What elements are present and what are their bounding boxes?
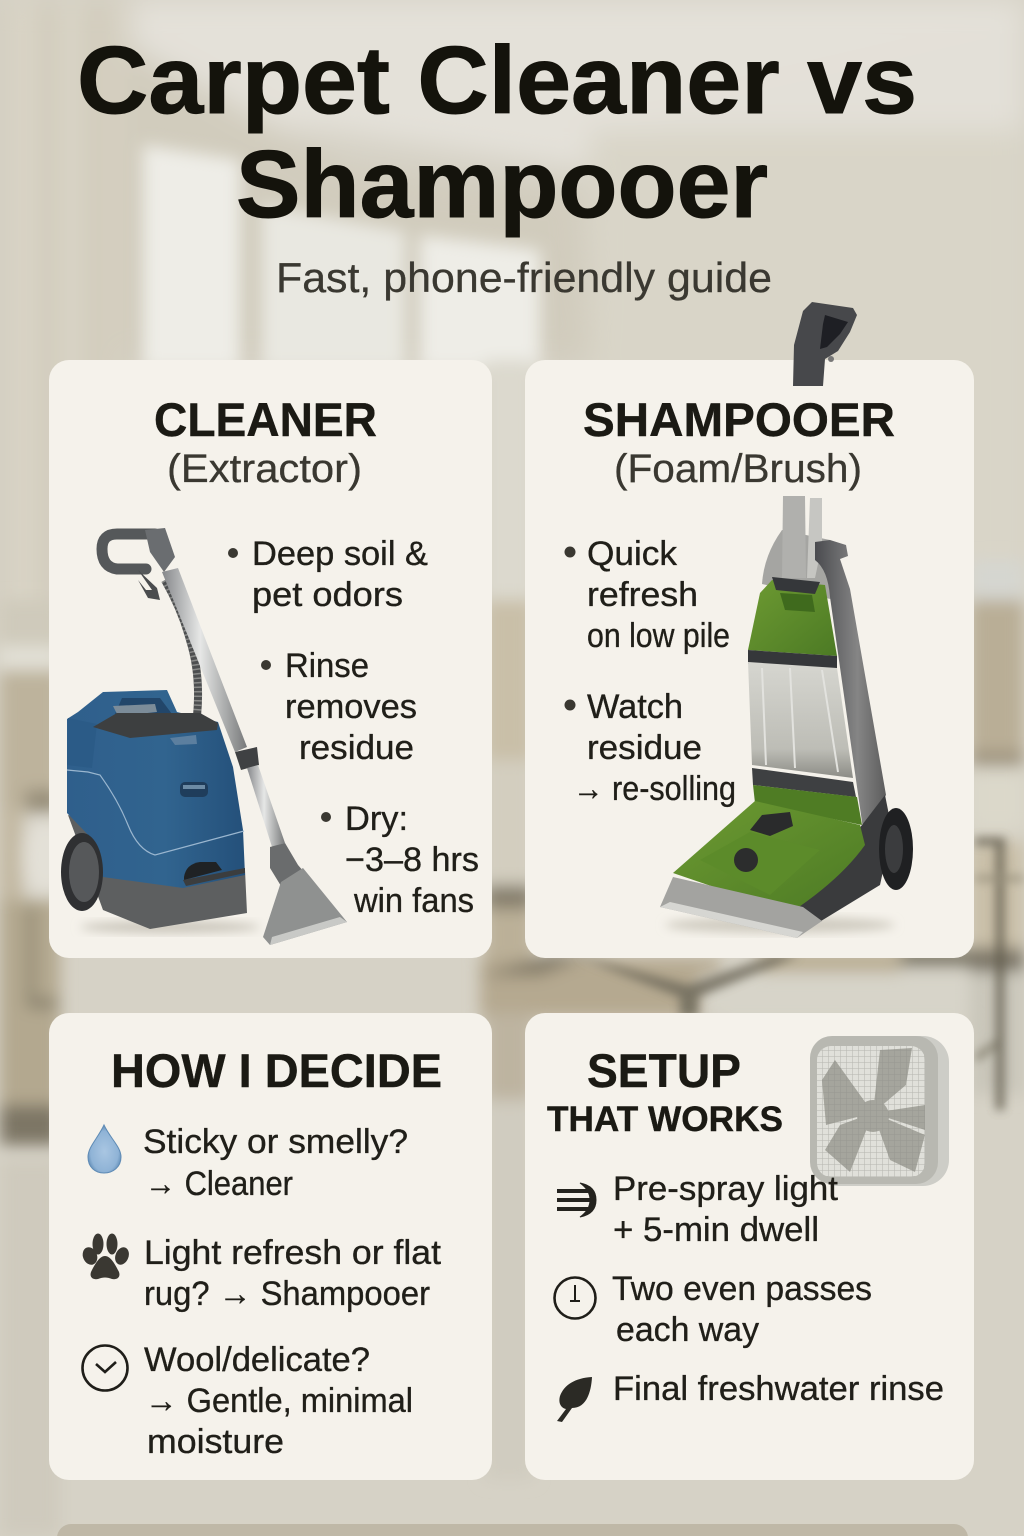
item: pre-spray: + 5-min dwell bbox=[613, 1211, 819, 1249]
panel: cleaner bbox=[49, 360, 492, 958]
subheading: extractor: (Extractor) bbox=[167, 447, 362, 491]
item: light refresh bbox=[80, 1234, 442, 1313]
item: final rinse: Final freshwater rinse bbox=[613, 1370, 944, 1408]
bullet: dry time bbox=[321, 800, 479, 920]
item: wool or delicate: → Gentle, minimal bbox=[145, 1382, 413, 1420]
title: Carpet Cleaner vs bbox=[77, 27, 917, 134]
item: sticky or smelly: Sticky or smelly? bbox=[143, 1123, 408, 1161]
bullet: rinse: removes bbox=[285, 688, 417, 726]
bullet: quick refresh bbox=[564, 535, 730, 655]
bullet: quick refresh: Quick bbox=[587, 535, 678, 573]
bullet: watch residue bbox=[564, 688, 736, 808]
panel: shampooer bbox=[525, 302, 974, 958]
heading: how I decide: HOW I DECIDE bbox=[111, 1044, 442, 1097]
icon: leaf bbox=[557, 1377, 592, 1422]
icon: water drop bbox=[88, 1125, 121, 1173]
bullet: quick refresh: refresh bbox=[587, 576, 698, 614]
icon: blue extractor machine bbox=[61, 528, 347, 945]
icon: green upright shampooer bbox=[660, 302, 913, 938]
icon: paw print bbox=[80, 1234, 131, 1279]
panel: bottom strip bbox=[57, 1524, 968, 1536]
item: wool or delicate: Wool/delicate? bbox=[144, 1341, 370, 1379]
bullet: watch residue: → re-solling bbox=[573, 770, 736, 808]
bullet: rinse: residue bbox=[299, 729, 414, 767]
item: wool or delicate: moisture bbox=[147, 1423, 284, 1461]
heading: cleaner: CLEANER bbox=[154, 393, 377, 446]
item: two even passes: each way bbox=[616, 1311, 759, 1349]
item: two even passes bbox=[554, 1270, 872, 1349]
bullet: watch residue: residue bbox=[587, 729, 702, 767]
panel: how I decide bbox=[49, 1013, 492, 1480]
bullet: rinse bbox=[261, 647, 417, 767]
item: wool or delicate bbox=[82, 1341, 413, 1461]
bullet: rinse: Rinse bbox=[285, 647, 369, 685]
panel: setup that works bbox=[525, 1013, 974, 1480]
icon: clock bbox=[554, 1278, 596, 1318]
bullet: dry time: Dry: bbox=[345, 800, 408, 838]
title bbox=[77, 27, 917, 238]
icon: box fan bbox=[810, 1036, 949, 1186]
item: pre-spray bbox=[557, 1170, 839, 1249]
item: light refresh: rug? → Shampooer bbox=[144, 1275, 430, 1313]
item: sticky or smelly bbox=[88, 1123, 408, 1203]
bullet: dry time: win fans bbox=[353, 882, 474, 920]
icon: circled check bbox=[82, 1346, 128, 1390]
bullet: dry time: −3–8 hrs bbox=[345, 841, 479, 879]
heading: setup: SETUP bbox=[587, 1044, 741, 1097]
icon: spray lines bbox=[557, 1183, 596, 1217]
item: sticky or smelly: → Cleaner bbox=[145, 1165, 293, 1203]
subheading: that works: THAT WORKS bbox=[547, 1100, 783, 1139]
item: two even passes: Two even passes bbox=[612, 1270, 872, 1308]
bullet: deep soil: Deep soil & bbox=[252, 535, 428, 573]
bullet: deep soil bbox=[228, 535, 428, 614]
bullet: watch residue: Watch bbox=[587, 688, 683, 726]
item: final rinse bbox=[557, 1370, 944, 1422]
item: pre-spray: Pre-spray light bbox=[613, 1170, 839, 1208]
bullet: quick refresh: on low pile bbox=[587, 617, 730, 655]
bullet: deep soil: pet odors bbox=[252, 576, 403, 614]
title: Shampooer bbox=[236, 131, 768, 238]
item: light refresh: Light refresh or flat bbox=[144, 1234, 442, 1272]
subtitle: Fast, phone-friendly guide bbox=[276, 254, 772, 301]
subheading: foam and brush: (Foam/Brush) bbox=[614, 447, 862, 491]
heading: shampooer: SHAMPOOER bbox=[583, 393, 895, 446]
